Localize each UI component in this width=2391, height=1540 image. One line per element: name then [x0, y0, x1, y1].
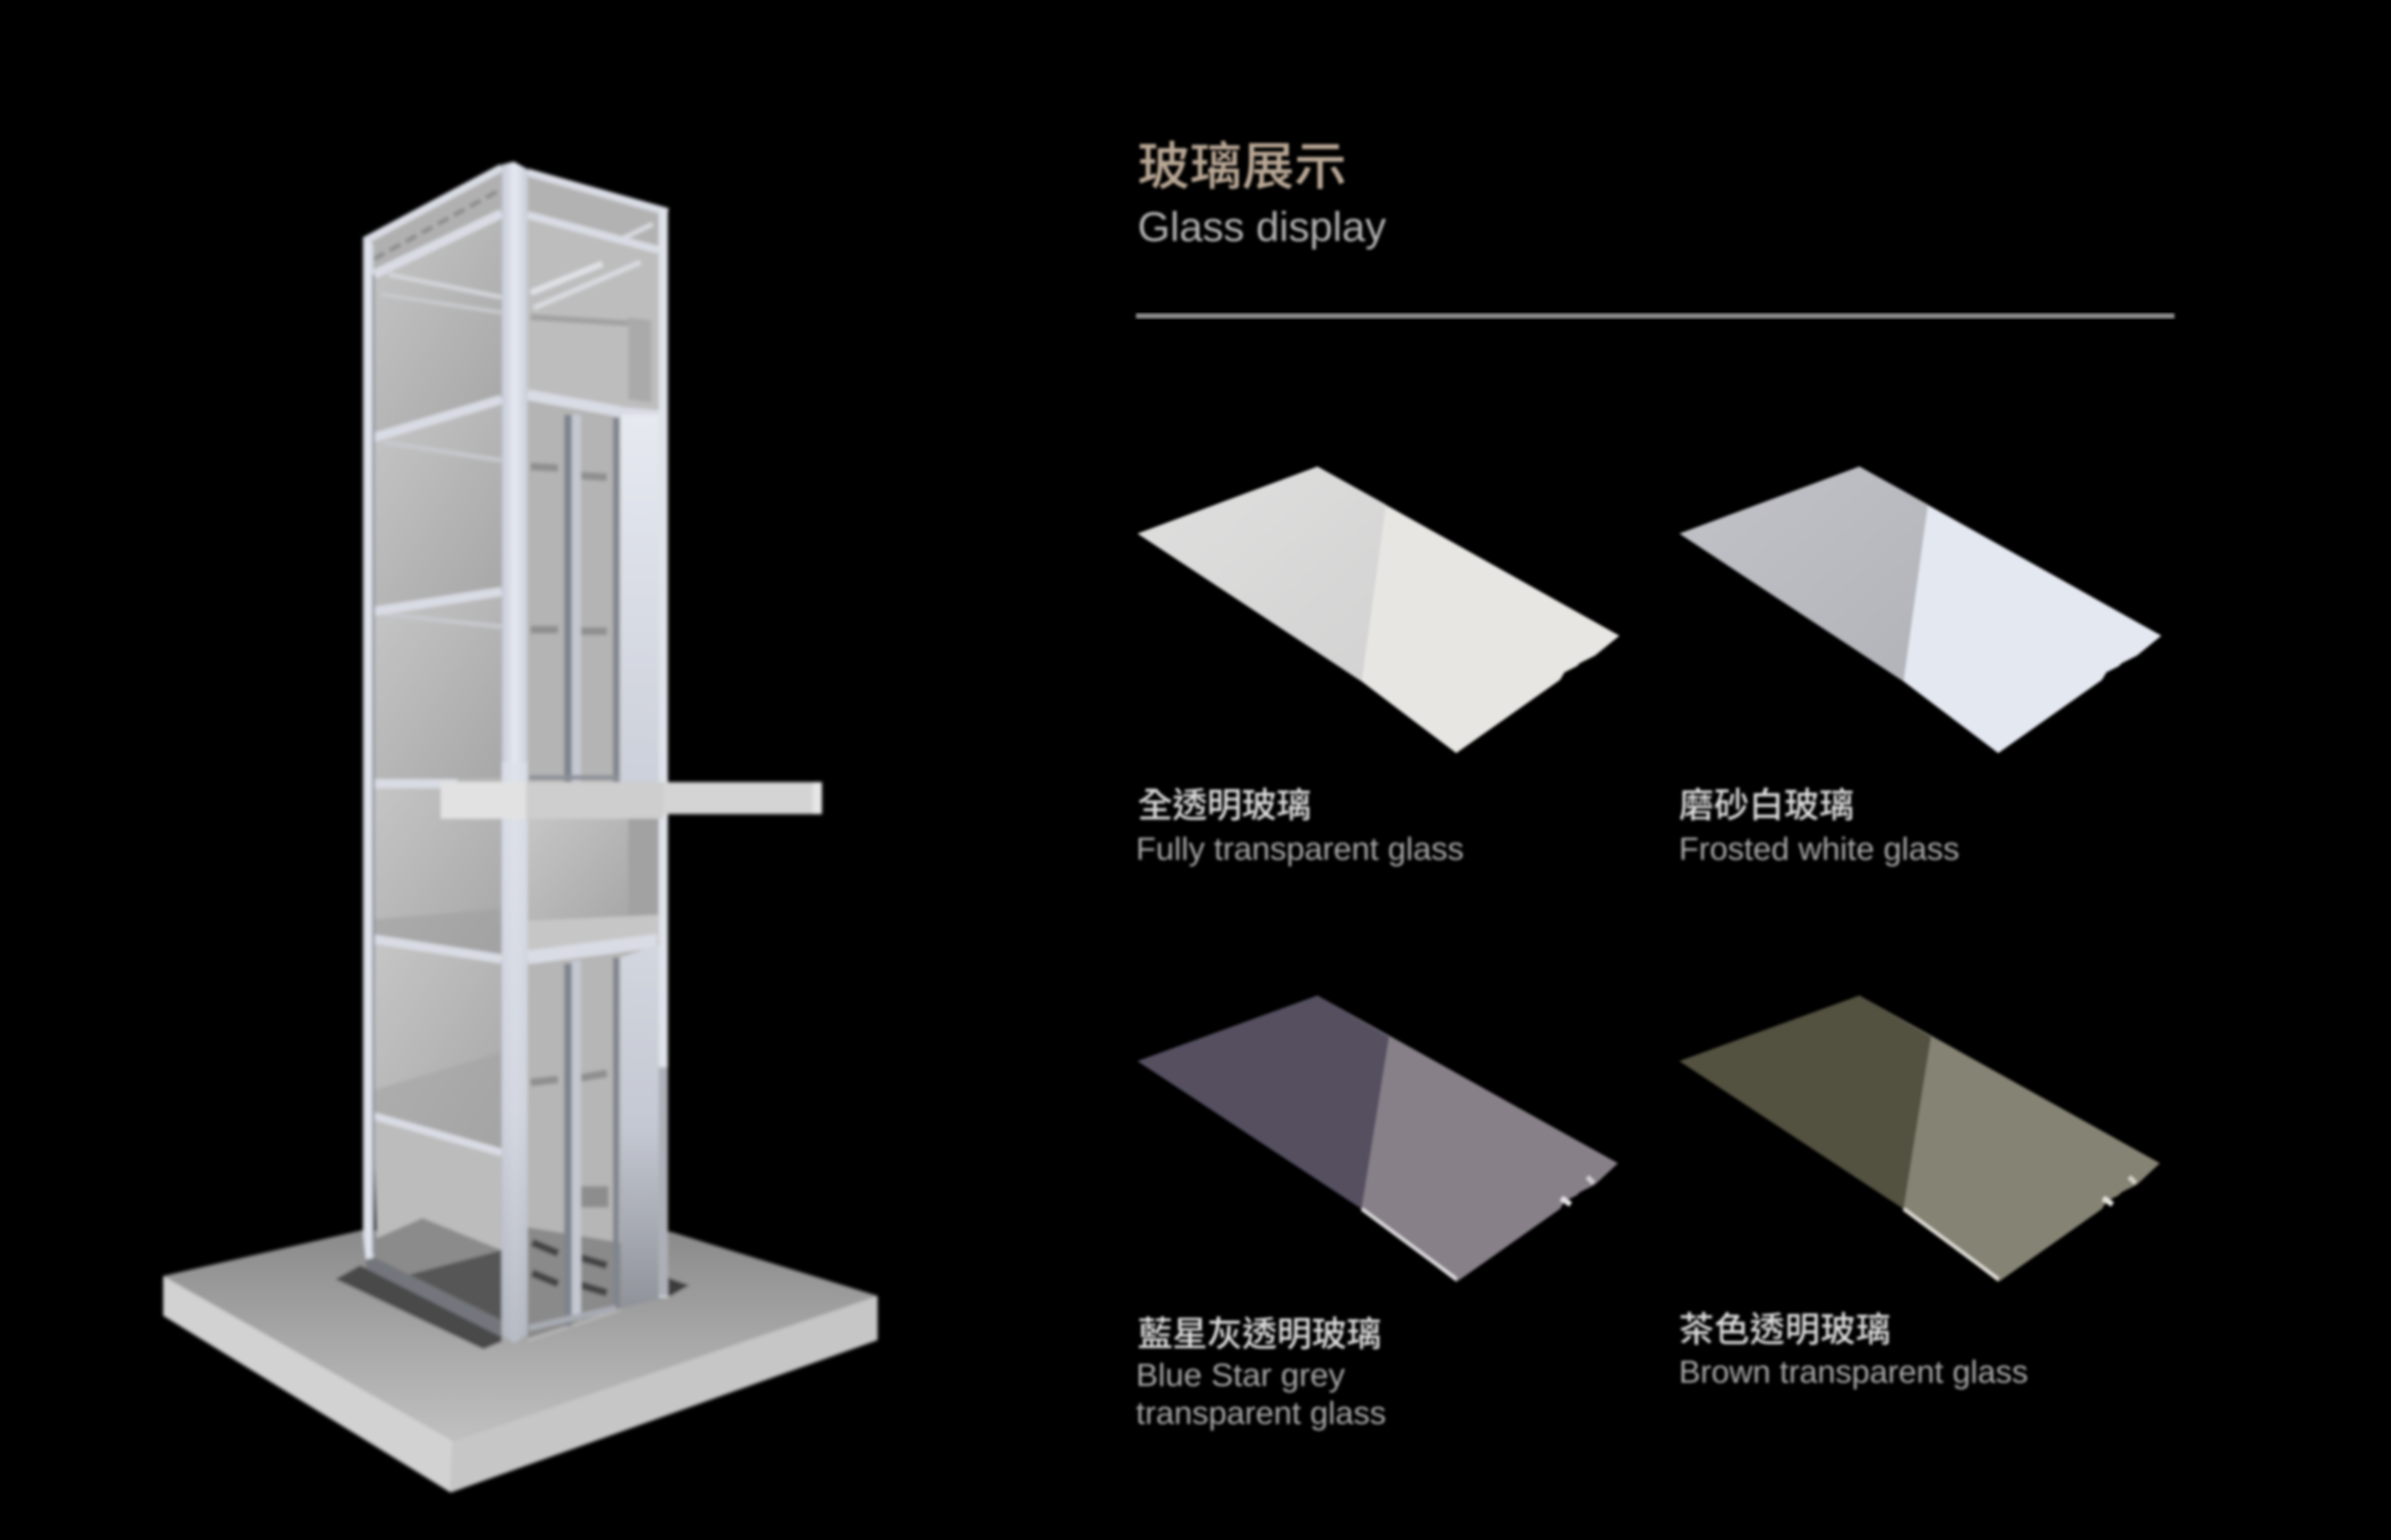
left corner post: [363, 238, 374, 1260]
label: 藍星灰透明玻璃: [1138, 1314, 1381, 1354]
right glass wall and door opening: [528, 169, 668, 1342]
section divider: [1136, 313, 2174, 319]
label: 磨砂白玻璃: [1679, 785, 1854, 824]
label: Blue Star grey: [1136, 1357, 1345, 1393]
glass sample: [1680, 466, 2161, 753]
concrete base slab: [163, 1230, 878, 1493]
label: 茶色透明玻璃: [1679, 1310, 1891, 1349]
label: Fully transparent glass: [1136, 831, 1464, 867]
left glass wall: [363, 165, 502, 1337]
illustration: glass elevator tower on concrete base: [163, 161, 878, 1493]
glass sample: [1138, 996, 1618, 1282]
label: Frosted white glass: [1679, 831, 1960, 867]
frame beams: [364, 168, 668, 1153]
panel: blue star grey glass: [1136, 996, 1618, 1431]
label: transparent glass: [1136, 1395, 1386, 1431]
label: 全透明玻璃: [1138, 785, 1311, 824]
panel: brown transparent glass: [1679, 996, 2160, 1390]
front corner post: [502, 161, 528, 1343]
glass sample: [1680, 996, 2160, 1282]
panel: fully transparent glass: [1136, 466, 1620, 867]
elevator pit opening: [335, 1265, 502, 1349]
landing platform slab: [440, 782, 822, 819]
label: [1136, 785, 1464, 867]
label: [1679, 1310, 2028, 1390]
door frame posts: upper door: [529, 415, 619, 782]
label: Brown transparent glass: [1679, 1354, 2028, 1390]
section title: Chinese: 玻璃展示: [1138, 138, 1346, 195]
label: [1679, 785, 1960, 867]
label: [1136, 1314, 1386, 1431]
section title: English: Glass display: [1138, 205, 1386, 250]
right side panels: [621, 210, 668, 1308]
panel: frosted white glass: [1679, 466, 2161, 867]
glass sample: [1138, 466, 1620, 753]
door frame posts: lower door: [529, 957, 619, 1328]
